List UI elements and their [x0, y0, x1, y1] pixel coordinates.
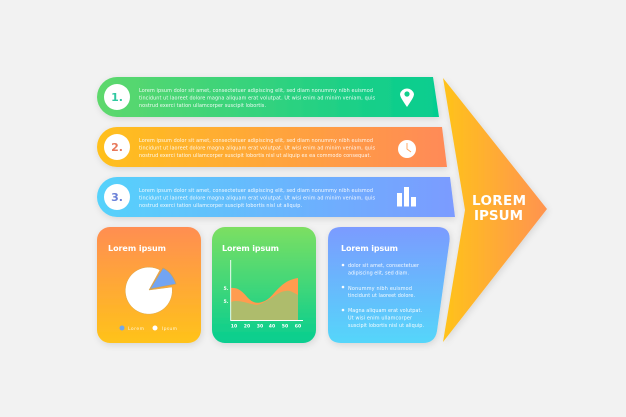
- axis labels: 20: [244, 324, 250, 330]
- bullet list: tincidunt ut laoreet dolore.: [348, 293, 415, 299]
- icon: location pin: [400, 88, 414, 107]
- text: step 2 description: nostrud exerci tation ullamcorper suscipit lobortis nisl ut aliquip ex ea commodo consequat.: [139, 153, 371, 159]
- panel: pie chart card: [97, 227, 201, 343]
- text: step 3 description: Lorem ipsum dolor sit amet, consectetuer adipiscing elit, sed diam nonummy nibh euismod: [139, 188, 373, 194]
- bullet list: Ut wisi enim ullamcorper: [348, 315, 413, 321]
- axis labels: 60: [295, 324, 301, 330]
- text: step 3 description: tincidunt ut laoreet dolore magna aliquam erat volutpat. Ut wisi enim ad minim veniam, quis: [139, 196, 375, 202]
- text: step 1 description: nostrud exerci tation ullamcorper suscipit lobortis.: [139, 103, 266, 109]
- card heading: Lorem ipsum: [222, 244, 279, 253]
- arrow label: [472, 193, 526, 224]
- axis labels: 10: [231, 324, 237, 330]
- bullet list: suscipit lobortis nisl ut aliquip.: [348, 323, 424, 329]
- legend: Lorem: [128, 326, 144, 332]
- bullet list: [342, 263, 424, 329]
- bullet list: adipiscing elit, sed diam.: [348, 270, 409, 276]
- axis labels: 5.: [224, 299, 229, 305]
- arrow label: LOREM: [472, 193, 526, 209]
- area chart: [224, 260, 303, 330]
- text: step 2 description: [139, 138, 375, 159]
- text: step 2 description: Lorem ipsum dolor sit amet, consectetuer adipiscing elit, sed diam nonummy nibh euismod: [139, 138, 373, 144]
- number badge 1: [104, 84, 130, 110]
- axis labels: 5.: [224, 286, 229, 292]
- number badge 2: 2.: [111, 141, 123, 154]
- arrow: [443, 78, 547, 342]
- panel: bullet list card: [328, 227, 450, 343]
- text: step 1 description: tincidunt ut laoreet dolore magna aliquam erat volutpat. Ut wisi enim ad minim veniam, quis: [139, 96, 375, 102]
- text: step 2 description: tincidunt ut laoreet dolore magna aliquam erat volutpat. Ut wisi enim ad minim veniam, quis: [139, 146, 375, 152]
- bullet list: Nonummy nibh euismod: [348, 286, 412, 292]
- legend: [120, 326, 177, 332]
- axis labels: 40: [269, 324, 275, 330]
- bullet list: Magna aliquam erat volutpat.: [348, 308, 422, 314]
- axis labels: [224, 286, 301, 330]
- number badge 3: 3.: [111, 191, 123, 204]
- text: step 3 description: nostrud exerci tation ullamcorper suscipit lobortis nisl ut aliquip.: [139, 203, 302, 209]
- text: step 1 description: [139, 88, 375, 109]
- panel: step 3 banner: [97, 177, 455, 217]
- text: step 3 description: [139, 188, 375, 209]
- pie chart: [125, 267, 176, 314]
- panel: step 1 banner: [97, 77, 439, 117]
- axis labels: 30: [257, 324, 263, 330]
- bullet list: dolor sit amet, consectetuer: [348, 263, 420, 269]
- arrow label: IPSUM: [474, 208, 523, 224]
- number badge 3: [104, 184, 130, 210]
- axis labels: 50: [282, 324, 288, 330]
- number badge 1: 1.: [111, 91, 123, 104]
- icon: bar chart: [397, 187, 416, 206]
- text: step 1 description: Lorem ipsum dolor sit amet, consectetuer adipiscing elit, sed diam nonummy nibh euismod: [139, 88, 373, 94]
- panel: step 2 banner: [97, 127, 447, 167]
- card heading: Lorem ipsum: [108, 244, 166, 253]
- panel: area chart card: [212, 227, 316, 343]
- icon: clock: [398, 140, 416, 158]
- legend: Ipsum: [162, 326, 177, 332]
- number badge 2: [104, 134, 130, 160]
- card heading: Lorem ipsum: [341, 244, 398, 253]
